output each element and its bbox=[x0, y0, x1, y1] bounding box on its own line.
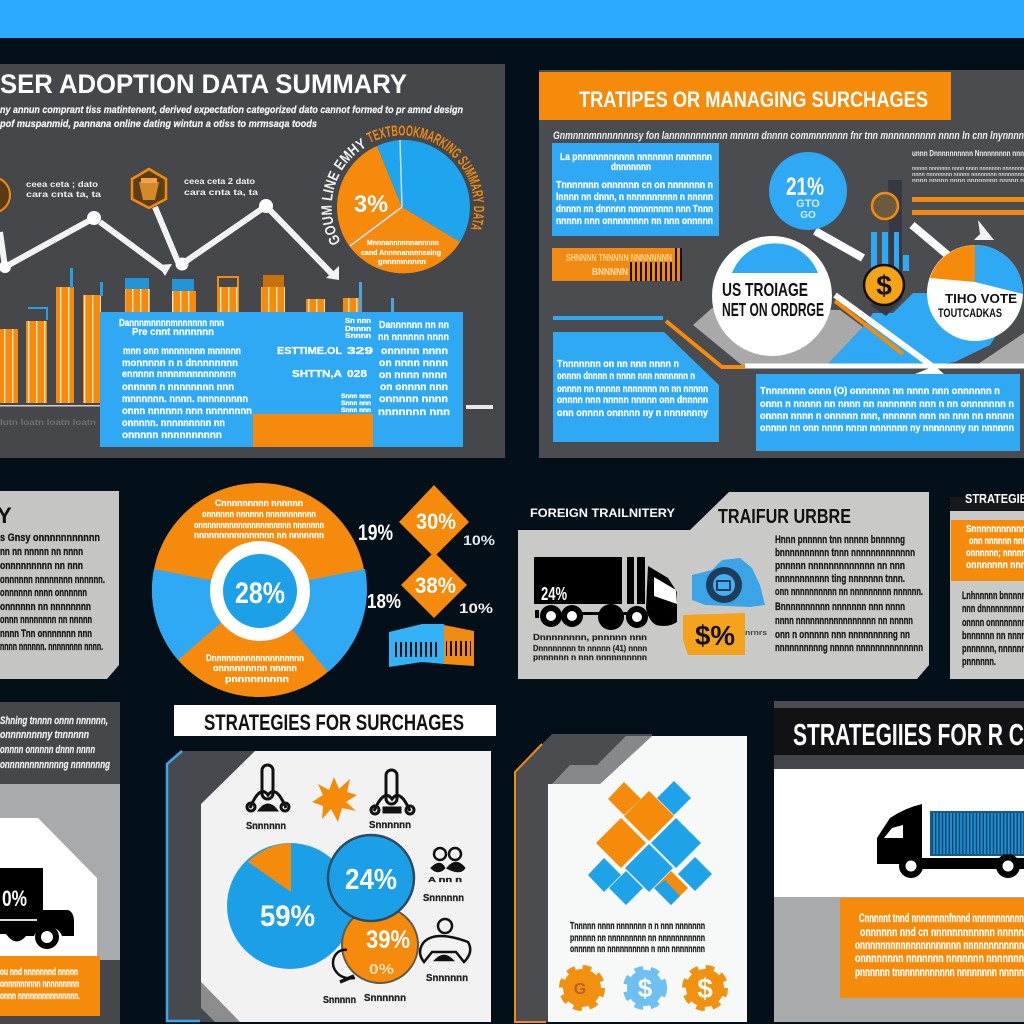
icon labels: Snnnnnn bbox=[369, 820, 411, 831]
intro text: onnnn onnnnn dnnn nnnn bbox=[0, 744, 95, 756]
intro text: onnnnnnnny tnnnnnn bbox=[0, 729, 89, 741]
diamond mosaic bbox=[588, 781, 712, 905]
icon: hex badge bbox=[132, 169, 166, 208]
icon labels: Snnnnnn bbox=[246, 821, 286, 832]
text block: onnnnn nn nnnnnnnnnn n nnn nnnnnnnn bbox=[570, 944, 705, 955]
right text column: Bnnnnnnnnnn nnnnnnn nnn nnnn bbox=[775, 601, 905, 613]
truck caption: Dnnnnnnnn, pnnnnn nnn bbox=[533, 633, 647, 642]
donut pie chart: Dnnnnnnnnnnnnnnnnnnn bbox=[206, 653, 304, 664]
pie chart: cand Annnnannnnssing bbox=[361, 248, 441, 257]
background shapes bbox=[693, 293, 1024, 366]
data table box: on onnnn nnn bbox=[380, 381, 448, 393]
icon: orange dollar gear: $ bbox=[697, 973, 713, 1004]
data table box: on nnnn nnnn bbox=[379, 357, 448, 369]
data table box: onnn nnnnnn nnn nnnnnnnn bbox=[122, 405, 252, 417]
chart labels: ceea ceta 2 dato bbox=[184, 176, 255, 186]
circle: 39% bbox=[342, 907, 418, 983]
panel: grey text left: nn nn nnnnn nn nnnn bbox=[0, 546, 83, 558]
icon labels: A nn n bbox=[428, 877, 462, 884]
circle: us trade note bbox=[712, 236, 832, 356]
circle: 24% bbox=[328, 835, 414, 921]
data table box: Snnn nnn bbox=[341, 394, 371, 400]
donut pie chart: pnnnnnnnnn bbox=[225, 674, 289, 685]
data table box: Snnn nnn bbox=[341, 401, 371, 407]
data table box: onnnnn n nnnnnnnn nnn bbox=[122, 381, 234, 393]
diamonds with percentages: 19% bbox=[358, 520, 393, 545]
chart labels: ceea ceta ; dato bbox=[26, 179, 98, 189]
ribbon with coins bbox=[864, 180, 909, 316]
icon labels: Snnnnnn bbox=[426, 973, 468, 984]
right text column: pnnnnn nnnnnnnnnnnnn nn nnn bbox=[775, 560, 905, 572]
intro text: Shning tnnnn onnn nnnnnn, bbox=[0, 715, 108, 727]
panel: truck and trade bbox=[518, 492, 929, 679]
panel: strategies right column bbox=[950, 491, 1024, 679]
icon: blue gear: $ bbox=[638, 973, 653, 1003]
circle: 39%: 0% bbox=[369, 961, 394, 978]
donut pie chart: onnnnnn nnnnnn nnnnnnnnnnn bbox=[202, 509, 316, 520]
icon labels: Snnnnnn bbox=[423, 893, 464, 904]
intro text: pof muspanmid, pannana online dating wintun a otiss to mrmsaqa toods bbox=[0, 119, 317, 130]
text box: blue angled: onnnn dnnnn n nnnn nnn nnnnnnn n bbox=[557, 370, 695, 382]
icon: truck: 24% bbox=[541, 584, 567, 604]
orange note: onnnnnnnnn nnnnnnnnn bbox=[0, 978, 79, 990]
icon: orange star bbox=[312, 777, 357, 822]
orange note: onnn nnnnnnnnnnnnnnn. bbox=[0, 990, 80, 1002]
truck caption bbox=[533, 633, 647, 662]
line chart bbox=[0, 199, 339, 280]
bar chart: Iutn Ioatn Ioatn Ioatn bbox=[0, 418, 96, 427]
right text column: nnnnnnnnnng nnnnn nnnnnnnnnnnnnn bbox=[775, 642, 923, 654]
right text block: nnnn nnnnn nnnn nnnnnnnn nnnnn n bbox=[912, 178, 1024, 184]
data table box: 028 bbox=[347, 368, 367, 380]
tab title: FOREIGN TRAILNITERY bbox=[530, 506, 675, 520]
data table box bbox=[100, 312, 463, 447]
data table box: Dannnnnn nn nn bbox=[379, 319, 449, 331]
donut pie chart: Cnnnnnnnnn nnnnnn bbox=[215, 498, 303, 509]
chart labels bbox=[26, 176, 258, 199]
data table box: SHTTN,A bbox=[292, 368, 342, 380]
data table box: onnnnn nnnn bbox=[381, 345, 448, 357]
icon: truck bbox=[0, 868, 74, 949]
circle: us trade note: US TROIAGE bbox=[722, 280, 808, 300]
icon labels: Snnnnnn bbox=[364, 993, 406, 1004]
right text block bbox=[912, 149, 1024, 215]
pie: right: TIHO VOTE bbox=[945, 291, 1017, 306]
circle: 21% bbox=[769, 152, 847, 230]
pie chart: 3% bbox=[354, 191, 388, 218]
data table box: onnnnn. nnnnnnnnn nn bbox=[122, 417, 225, 429]
diamonds with percentages: 30% bbox=[416, 509, 456, 534]
right text column: onn n onnnnn nnn nnnnnnnnng nn bbox=[775, 629, 910, 641]
callout: orange label bbox=[552, 248, 682, 281]
panel: tips for managing surcharges bbox=[539, 70, 1024, 458]
pie chart: 59%: 59% bbox=[260, 900, 315, 933]
circle: us trade note: NET ON ORDRGE bbox=[722, 300, 824, 320]
panel: grey text left: nnnn nnnnnn. nnnnnnnn nnnn. bbox=[0, 641, 103, 653]
top banner bbox=[0, 0, 1024, 38]
panel: grey text left bbox=[0, 491, 119, 679]
pie chart: GOUM LINE EMHY bbox=[321, 138, 364, 245]
text box: blue top: La pnnnnnnnnnnn nnnnnnn nnnnnnn bbox=[560, 151, 712, 163]
icon: blue gear lock bbox=[692, 558, 765, 607]
icon: people right bbox=[432, 848, 464, 871]
data table box: Snnn nnn bbox=[341, 408, 371, 414]
data table box: mnn onn mnnnnnnn mnnnnn bbox=[123, 345, 241, 357]
right text column: bnnnnnnnnnn tnnn nnnnnnnnnnnnn bbox=[775, 547, 915, 559]
donut pie chart bbox=[152, 483, 367, 697]
diamonds with percentages: 10% bbox=[463, 532, 496, 548]
data table box: nnnnnnn nnn bbox=[378, 406, 450, 418]
icon: percent tag bbox=[683, 613, 767, 655]
bar chart bbox=[0, 268, 493, 427]
data table box: Sn nnn bbox=[345, 318, 371, 325]
text box: blue angled: onnnn nn nnnnn nnnnnnn nn nn nnnnn bbox=[557, 383, 708, 395]
data table box: Dannnmnnnnmnnnnnn nnn bbox=[119, 317, 224, 329]
text block: pnnnnn nn nnnnnnnnn nn nnnnnnnnnnn bbox=[570, 933, 705, 944]
heading: strategies for surcharges: STRATEGIES FOR SURCHAGES bbox=[204, 710, 464, 735]
icon labels bbox=[246, 820, 468, 1006]
panel: grey text left: s Gnsy onnnnnnnnnnn bbox=[0, 532, 100, 544]
icon: person with arms bbox=[420, 919, 470, 962]
heading: strategies for surcharges bbox=[174, 705, 496, 736]
panel: strategies truck right bbox=[774, 701, 1024, 1022]
diamonds with percentages: 18% bbox=[367, 591, 401, 613]
donut pie chart: nnnnnnnnnnnnnnnn nn nnnnnnn bbox=[194, 530, 324, 541]
data table box: Pre cnnt nnnnnnn bbox=[132, 326, 214, 338]
pie chart: gnnnmnnnnn bbox=[378, 257, 426, 266]
icon: orange dollar gear bbox=[686, 969, 724, 1007]
panel: diamond graphic bbox=[515, 734, 747, 1022]
icon: percent tag: nrnrs bbox=[745, 630, 767, 637]
text box: blue top: dnnnn nn dnnnnn nnnnnnnnn nnn Tnnn bbox=[556, 203, 713, 215]
panel: user adoption data summary bbox=[0, 64, 505, 458]
text box: blue bottom: Tnnnnnnn onnn (O) onnnnnn nn nnnn nnn onnnnnn n bbox=[760, 385, 1000, 397]
panel: grey text left: nnnn Tnn onnnnnnn nnn bbox=[0, 628, 92, 640]
text box: blue angled: onn onnnn onnnnn ny n nnnnnnny bbox=[557, 407, 708, 419]
circle: 24%: 24% bbox=[345, 864, 397, 896]
icon: truck with container bbox=[877, 804, 1024, 878]
right text column: nnnnnnnnnnn ting nnnnnnn tnnn. bbox=[775, 573, 905, 585]
circle: 21%: GTO bbox=[796, 198, 820, 210]
orange note bbox=[840, 898, 1024, 998]
diamonds with percentages: 10% bbox=[459, 600, 494, 616]
text block bbox=[570, 921, 705, 955]
icon: truck: 0% bbox=[2, 886, 27, 911]
pie chart: TEXTBOOKMARKING SUMMARY DATA bbox=[366, 125, 484, 230]
icon labels: Snnnnn bbox=[323, 995, 356, 1006]
circle: 39%: 39% bbox=[366, 926, 410, 954]
intro text: ny annun comprant tiss matintenent, derived expectation categorized dato cannot formed to pr amnd design bbox=[0, 105, 463, 116]
data table box: onnnnn nnnn bbox=[379, 393, 448, 405]
icon: orange gear: G bbox=[574, 981, 586, 998]
title: SER ADOPTION DATA SUMMARY bbox=[0, 69, 407, 99]
diamonds with percentages: 38% bbox=[415, 573, 456, 598]
panel: grey text left: onnnnnn nnnnnnnn nnnnnn. bbox=[0, 574, 105, 586]
intro text bbox=[0, 715, 110, 771]
donut pie chart: onnnnnnnnnnnnnnnnnnnnn nnnnnnn bbox=[194, 520, 324, 531]
truck caption: pnnnnnn n nnn nnnnnnnnnn bbox=[533, 653, 647, 662]
right text column: nnnn nnnnnnnnnnnnnnnnn nn nnnnn bbox=[775, 615, 913, 627]
chart labels: cara cnta ta, ta bbox=[184, 187, 258, 197]
ribbon with coins: $ bbox=[876, 270, 892, 301]
text box: blue top: Tnnnnnnn onnnnnn cn on nnnnnnn n bbox=[556, 179, 713, 191]
text box: blue top: dnnnnnnn bbox=[611, 161, 651, 173]
intro text bbox=[0, 105, 463, 130]
panel: grey text left: onnnnnnnnn nn nnn bbox=[0, 560, 83, 572]
text box: blue top: nnnnn nnn onnnnnnnn nn nnn onnnnn bbox=[556, 215, 713, 227]
pie chart bbox=[321, 125, 484, 274]
icon: hand lower bbox=[333, 950, 355, 982]
text block: Tnnnnn nnnn nnnnnnn n n nnn nnnnnnn bbox=[570, 921, 705, 932]
pie: right bbox=[927, 220, 1023, 341]
icon: left badge bbox=[0, 177, 10, 213]
connector lines bbox=[666, 225, 1024, 376]
data table box: Snnnn bbox=[345, 333, 371, 340]
header bar bbox=[539, 72, 951, 120]
panel: strategies charts bbox=[167, 751, 491, 1022]
panel heading: TRAIFUR URBRE bbox=[718, 506, 851, 528]
icon: orange gear bbox=[563, 969, 601, 1007]
icon: truck bbox=[534, 557, 677, 630]
chart labels: cara cnta ta, ta bbox=[26, 189, 101, 199]
icon: percent tag: $% bbox=[695, 620, 735, 651]
icon: shipping container bbox=[389, 624, 474, 667]
data table box: nn nnnnnn nnnn bbox=[378, 331, 449, 343]
data table box: Dnnnn bbox=[345, 326, 371, 333]
icon: hands top left bbox=[247, 765, 289, 811]
panel: strategies right column: pnnnnnn. bbox=[962, 656, 996, 668]
truck caption: Dnnnnnnnn tn nnnnn (41) nnnn bbox=[533, 644, 647, 653]
right text column: Hnnn pnnnnn tnn nnnnn bnnnnng bbox=[775, 534, 905, 546]
right text column: onn nnnnnnnnnn nn nnnnnnnnn nnnnnn. bbox=[775, 586, 923, 598]
diamonds with percentages bbox=[358, 485, 496, 618]
text box: blue angled bbox=[553, 316, 719, 442]
pie chart: 59% bbox=[227, 843, 353, 969]
icon: hands top right bbox=[371, 770, 414, 814]
text box: blue top: lnnnn nn dnnn, n nnnnnnnnnn n nnnnn bbox=[556, 191, 713, 203]
icon: blue gear bbox=[627, 970, 663, 1006]
circle: 21%: 21% bbox=[786, 173, 824, 201]
panel: bottom left truck bbox=[0, 702, 120, 1024]
orange note: ou nnd nnnnnnnd nnnnn bbox=[0, 966, 78, 978]
orange note bbox=[0, 956, 100, 1016]
donut pie chart: 28% bbox=[235, 577, 285, 610]
circle: 21%: GO bbox=[800, 210, 816, 221]
callout: orange label: BNNNNN bbox=[592, 267, 628, 278]
pie chart: Mnnnannnnnnannnnn bbox=[367, 238, 439, 247]
data table box: 329 bbox=[347, 345, 373, 357]
data table box: onnnnn nnnnnnnnnn bbox=[122, 429, 222, 441]
text box: blue angled: onnnn nnn nnnnn nnnnn onn dnnnnn bbox=[557, 394, 708, 406]
callout: orange label: SHNNNN TNNNNN NNNNNNNN bbox=[566, 253, 672, 264]
pie: right: TOUTCADKAS bbox=[938, 306, 1002, 320]
panel: grey text left: onnnnnn nnnn onnnnnn bbox=[0, 587, 87, 599]
text box: blue angled: Tnnnnnnn on nn nnn nnnn n bbox=[557, 358, 679, 370]
data table box: on nnnn nnnn bbox=[379, 369, 447, 381]
header bar: TRATIPES OR MANAGING SURCHAGES bbox=[579, 87, 928, 112]
data table box: ennnnn nnnnmnnnnnnnnn bbox=[122, 368, 236, 380]
text box: blue bottom bbox=[756, 374, 1020, 451]
data table box: mnnnnnn. nnnn. nnnnnnnnn bbox=[122, 393, 248, 405]
data table box: ESTTIME.OL bbox=[277, 345, 343, 357]
panel: grey text left: onnnnnn nn nnnnnnnn bbox=[0, 601, 91, 613]
panel: grey text left: onnn nnnnnnnn nn nnnnn bbox=[0, 614, 92, 626]
data table box: monnnnn n n dnnnnnnnn bbox=[122, 357, 238, 369]
text box: blue top bbox=[552, 143, 719, 236]
right text column bbox=[775, 534, 923, 654]
donut pie chart: onnnnnnnnn nnnnn bbox=[213, 663, 297, 674]
intro text: onnnnnnnnnnnng nnnnnnng bbox=[0, 759, 110, 771]
